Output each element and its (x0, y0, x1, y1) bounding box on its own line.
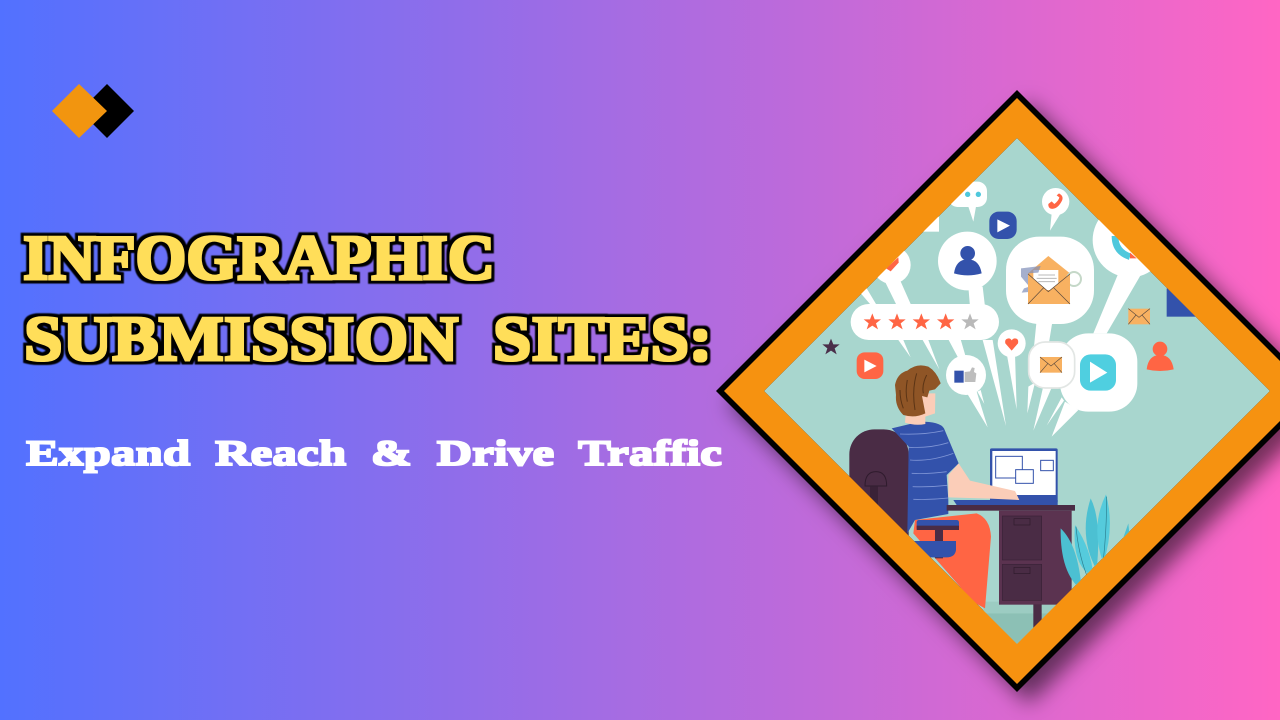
teal arc (1115, 236, 1130, 257)
diamond frame with illustration (716, 90, 1280, 692)
small mail bubble (1029, 342, 1075, 388)
heart icon (1005, 338, 1018, 351)
hair (895, 365, 941, 416)
blue play icon (989, 212, 1017, 239)
blue square (1167, 288, 1200, 317)
illustration clipped to diamond (822, 182, 1200, 647)
small envelope bubble icon (1040, 357, 1062, 373)
left heart fragment (886, 257, 899, 271)
user icon (954, 246, 982, 275)
frame border and shadow (716, 90, 1280, 692)
subtitle: Expand Reach & Drive Traffic (26, 433, 722, 473)
arm (948, 463, 1019, 500)
top chat bubble (948, 182, 987, 207)
person at desk (849, 365, 1130, 647)
left heart bubble (878, 250, 911, 283)
neck and face (905, 393, 935, 425)
envelope large (1021, 256, 1081, 304)
shirt stripes (900, 431, 953, 499)
phone icon (1048, 193, 1063, 209)
dark star (822, 339, 840, 354)
top-right bubble (1092, 220, 1150, 276)
like icon (954, 367, 976, 383)
like bubble (946, 355, 986, 395)
logo: overlapping diamonds (52, 84, 134, 138)
envelope scrap (923, 217, 939, 232)
video bubble (1060, 333, 1137, 412)
plant (1061, 494, 1130, 590)
orange border (724, 98, 1280, 684)
user bubble (938, 232, 997, 290)
title (23, 223, 712, 374)
chair back (849, 429, 909, 536)
icons and speech bubbles (822, 182, 1200, 437)
red user icon (1147, 342, 1174, 371)
mail bubble (1006, 237, 1094, 324)
floor (983, 602, 1060, 613)
orange play icon (857, 352, 883, 379)
title: SUBMISSION SITES: (24, 304, 712, 374)
bubble tails (859, 207, 1142, 437)
teal panel (764, 138, 1270, 644)
seat (913, 520, 959, 558)
phone bubble (1042, 188, 1069, 215)
teal play icon (1080, 354, 1116, 391)
rating pill (851, 304, 999, 340)
title: INFOGRAPHIC (23, 223, 495, 293)
trousers (913, 513, 991, 608)
small envelope right (1128, 309, 1150, 324)
chat dots (965, 192, 981, 197)
heart bubble (998, 329, 1026, 357)
rating stars (864, 313, 979, 329)
laptop (953, 448, 1058, 505)
shirt (892, 422, 959, 533)
desk (947, 505, 1075, 628)
